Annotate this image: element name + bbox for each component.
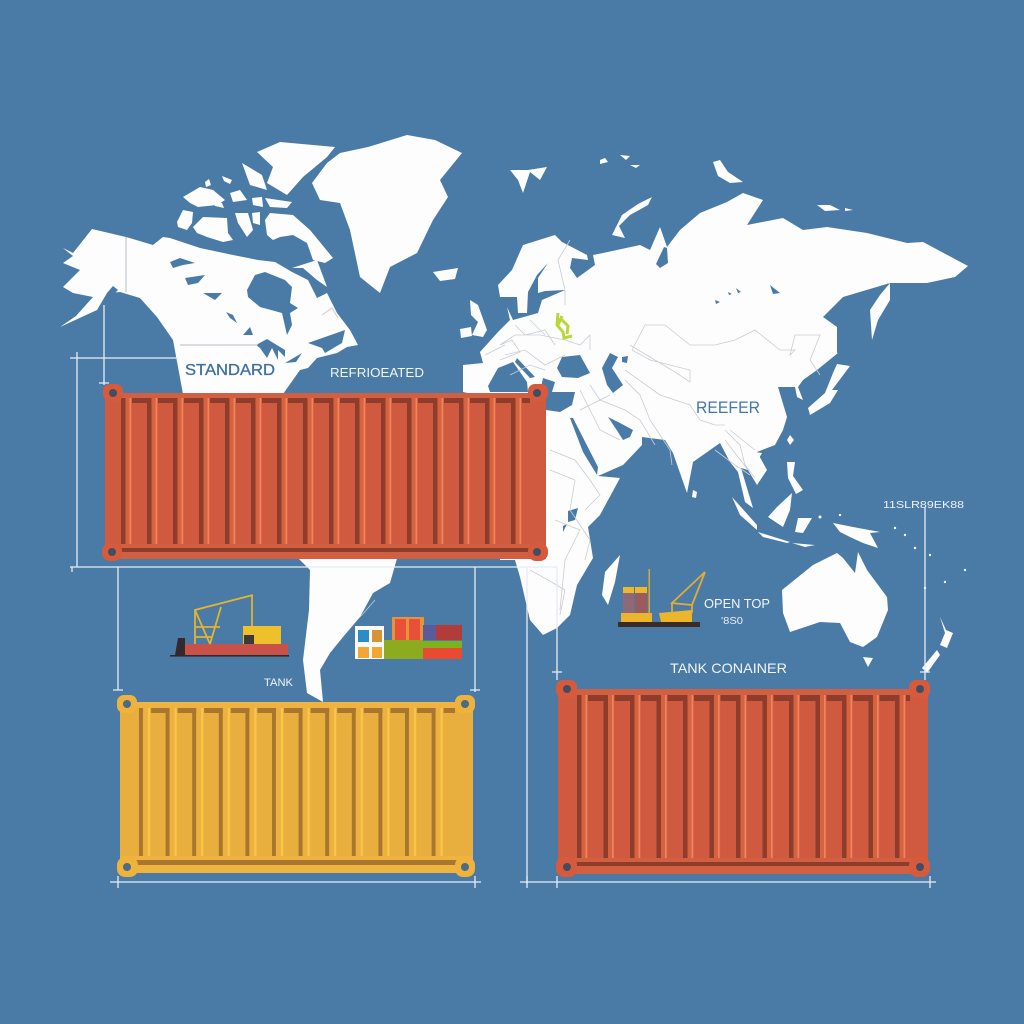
container body — [105, 393, 546, 559]
Eurasia and Africa — [463, 193, 968, 635]
container: red tank container — [556, 680, 930, 877]
world map — [60, 135, 968, 702]
top and bottom rails — [105, 393, 546, 559]
North America lakes and bays — [107, 258, 345, 363]
label: tank container: TANK CONAINER — [670, 660, 787, 676]
North America — [60, 142, 358, 394]
icon: port cranes and ship — [618, 569, 705, 627]
country borders — [308, 240, 820, 640]
label: refrigerated: REFRIOEATED — [330, 365, 424, 380]
corner castings — [556, 680, 930, 877]
Eurasian inland seas — [488, 247, 841, 532]
label: standard: STANDARD — [185, 362, 275, 379]
corrugated wall — [139, 708, 455, 856]
container: yellow tank — [117, 695, 475, 877]
label: island code: 11SLR89EK88 — [883, 499, 964, 511]
corrugated wall — [121, 398, 530, 544]
US and Canada border lines — [126, 237, 338, 345]
Greenland and Iceland — [312, 135, 462, 293]
icon: crane barge — [170, 595, 289, 657]
dimension lines — [70, 305, 936, 888]
South America — [295, 555, 398, 702]
container: red standard — [102, 384, 548, 561]
label: open top sub-code: '8S0 — [721, 616, 743, 627]
icon: stacked cargo containers — [355, 617, 462, 659]
corrugated wall — [577, 695, 910, 858]
label: reefer: REEFER — [696, 398, 760, 417]
Asian and Pacific islands — [460, 155, 966, 673]
corner castings — [102, 384, 548, 561]
corner castings — [117, 695, 475, 877]
rails — [120, 702, 473, 708]
label: tank: TANK — [264, 677, 294, 689]
green highlighted region — [557, 313, 572, 338]
label: open top: OPEN TOP — [704, 596, 770, 611]
rails — [558, 689, 928, 695]
